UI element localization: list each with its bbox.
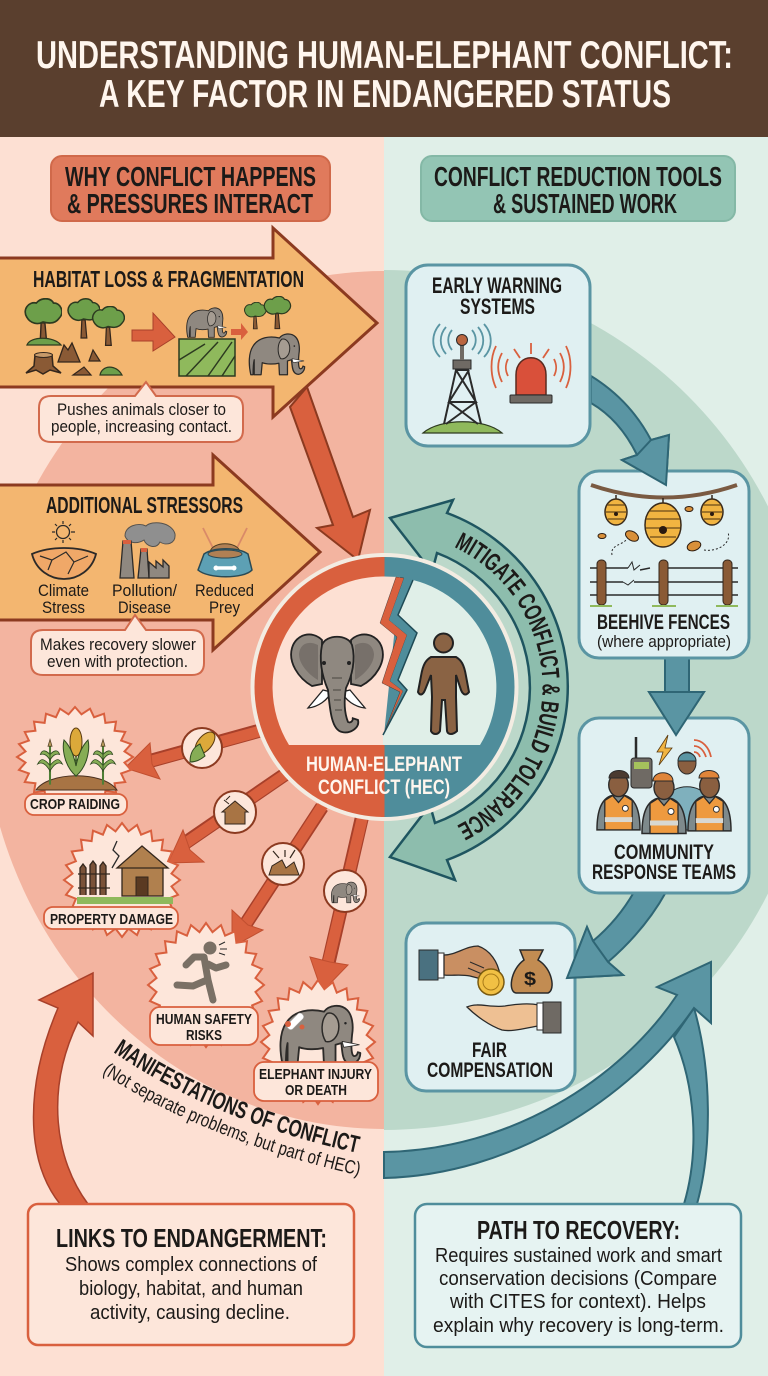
callout: additional stressors: Makes recovery slower	[40, 635, 196, 654]
icon badge: corn	[182, 728, 222, 768]
card title: SYSTEMS	[460, 294, 535, 319]
card title	[427, 1039, 553, 1082]
body text: explain why recovery is long-term.	[433, 1315, 724, 1337]
inner disc right side	[383, 580, 496, 745]
labels: stressor items	[38, 581, 254, 617]
icon: bees	[598, 506, 729, 555]
card title: EARLY WARNING	[432, 273, 562, 298]
icon: beehives on branch	[591, 485, 737, 547]
icon: money bag: $	[524, 969, 536, 989]
card: fair compensation	[406, 923, 575, 1091]
icon badge: damaged goods	[262, 843, 304, 885]
burst: elephant injury	[254, 980, 378, 1104]
icon: red arrow	[132, 313, 175, 351]
label: HEC	[306, 753, 462, 799]
arrow: habitat to centre	[290, 387, 370, 560]
spoke: to human safety	[232, 805, 323, 947]
lightning crack	[380, 577, 417, 735]
icon: injured elephant	[280, 1006, 360, 1065]
background: left half	[0, 137, 384, 1376]
label	[150, 1007, 258, 1045]
icon badge: elephant	[324, 870, 366, 912]
labels: stressor items: Pollution/	[112, 581, 177, 600]
body text: biology, habitat, and human	[79, 1278, 303, 1300]
icon: reduced prey bowl	[198, 528, 252, 577]
label: RISKS	[186, 1027, 222, 1044]
big circle: right half	[384, 270, 768, 1130]
panel: path to recovery	[415, 1204, 741, 1347]
card title	[432, 273, 562, 319]
icon badge: house	[214, 791, 256, 833]
left section heading: & PRESSURES INTERACT	[67, 188, 313, 219]
icon: large elephant	[249, 334, 305, 375]
card title: FAIR	[472, 1039, 507, 1062]
icon: forest and stumps	[25, 299, 124, 375]
spoke: to crop raiding	[125, 730, 264, 779]
header band	[0, 0, 768, 137]
arrow: beehive to community	[649, 657, 704, 735]
curved arrow: mitigate conflict and build tolerance: MITIGATE CONFLICT & BUILD TOLERANCE	[455, 532, 560, 840]
icon: human figure	[418, 634, 469, 734]
spoke: to property damage	[168, 772, 289, 863]
callout: additional stressors: even with protection.	[47, 652, 188, 671]
central HEC circle	[250, 553, 518, 821]
heading: additional stressors: ADDITIONAL STRESSORS	[46, 492, 243, 518]
left section heading: WHY CONFLICT HAPPENS	[65, 161, 316, 192]
spoke: to elephant injury	[310, 815, 363, 992]
burst: human safety risks	[148, 923, 264, 1047]
labels: stressor items: Prey	[209, 598, 240, 617]
panel: links to endangerment	[28, 1204, 354, 1345]
body text	[65, 1254, 317, 1324]
card title: COMMUNITY	[614, 841, 714, 864]
icon: small arrow and trees	[231, 296, 291, 340]
label: ELEPHANT INJURY	[259, 1066, 372, 1083]
arrow: sweeping recovery curve	[384, 962, 711, 1178]
label: OR DEATH	[285, 1082, 347, 1099]
panel: additional stressors arrow	[0, 455, 320, 650]
callout: habitat loss	[39, 382, 243, 442]
label: HUMAN SAFETY	[156, 1011, 252, 1028]
heading: habitat loss: HABITAT LOSS & FRAGMENTATION	[33, 266, 304, 292]
arrow head over beehive card	[622, 435, 669, 485]
background: right half	[384, 137, 768, 1376]
arrow: links to endangerment curve	[33, 973, 93, 1204]
icon: receiving hand	[467, 1002, 561, 1033]
body text	[433, 1245, 724, 1337]
body text: Shows complex connections of	[65, 1254, 317, 1276]
arrow head over compensation card	[567, 927, 623, 978]
card title	[592, 841, 736, 884]
icon: pollution and disease	[120, 523, 175, 578]
labels: stressor items: Climate	[38, 581, 89, 600]
curved arrow: mitigate conflict and build tolerance	[388, 498, 570, 882]
arrow: early warning to beehive	[591, 376, 669, 485]
body text: with CITES for context). Helps	[449, 1291, 706, 1313]
icon: elephant on field	[179, 308, 235, 376]
label	[254, 1062, 378, 1101]
right section heading	[421, 156, 735, 221]
icon: damaged hut and fence	[77, 841, 173, 904]
icon: radio tower	[423, 324, 502, 433]
card: early warning systems	[406, 265, 590, 446]
title	[36, 34, 733, 116]
burst: crop raiding	[17, 707, 133, 815]
icon: radio and signal	[631, 735, 711, 788]
body text: Requires sustained work and smart	[435, 1245, 722, 1267]
labels: stressor items: Disease	[118, 598, 171, 617]
icon: alarm siren	[492, 343, 570, 403]
heading: LINKS TO ENDANGERMENT:	[56, 1223, 327, 1253]
panel: habitat loss arrow	[0, 228, 377, 417]
icon: corn plants	[36, 728, 117, 790]
inner disc left side	[273, 576, 400, 745]
card: beehive fences	[579, 471, 749, 658]
arrow: community to compensation	[567, 892, 666, 978]
card title: (where appropriate)	[597, 632, 731, 651]
icon: fence	[590, 560, 738, 606]
icon: elephant face	[291, 634, 383, 732]
heading: PATH TO RECOVERY:	[477, 1215, 680, 1245]
icon: climate stress	[32, 521, 96, 579]
curved heading: manifestations of conflict: MANIFESTATIONS OF CONFLICT	[114, 1038, 361, 1152]
icon: response team	[597, 752, 731, 834]
big circle: left half	[0, 271, 384, 1129]
icon: money bag	[511, 950, 552, 993]
labels: stressor items: Reduced	[195, 581, 254, 600]
arrow head over community card	[649, 692, 704, 735]
card title: COMPENSATION	[427, 1059, 553, 1082]
body text: activity, causing decline.	[90, 1302, 290, 1324]
arrow: recovery path thin curve	[674, 1008, 708, 1204]
icon: giving hand and coin	[419, 946, 504, 995]
body text: conservation decisions (Compare	[439, 1268, 717, 1290]
curved heading: manifestations of conflict: (Not separate problems, but part of HEC)	[102, 1063, 360, 1178]
labels: stressor items: Stress	[42, 598, 85, 617]
card title	[597, 611, 731, 651]
card: community response teams	[579, 718, 749, 893]
left section heading	[51, 156, 330, 221]
label: PROPERTY DAMAGE	[50, 911, 173, 928]
label: HEC: CONFLICT (HEC)	[318, 776, 450, 799]
callout: additional stressors	[31, 615, 204, 675]
label: HEC: HUMAN-ELEPHANT	[306, 753, 462, 776]
callout: habitat loss: people, increasing contact.	[51, 417, 232, 436]
burst: property damage	[44, 823, 180, 937]
label: CROP RAIDING	[30, 796, 120, 813]
callout: habitat loss: Pushes animals closer to	[57, 400, 226, 419]
icon: running person	[177, 942, 227, 1000]
